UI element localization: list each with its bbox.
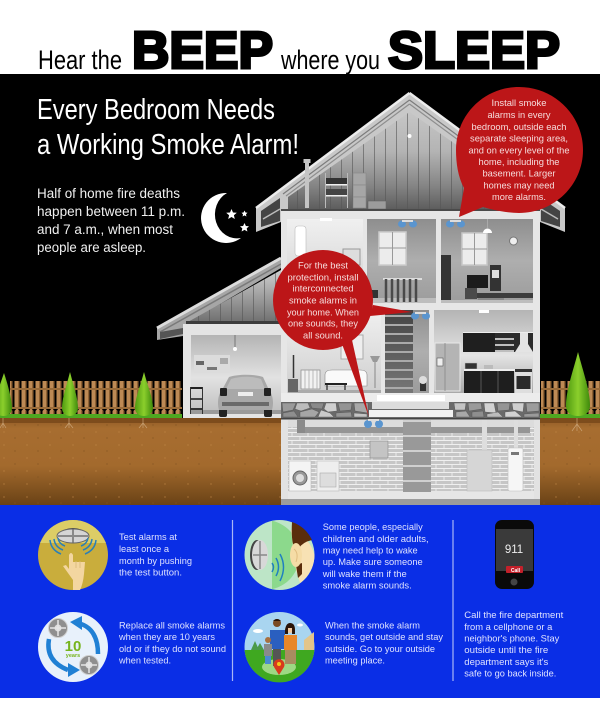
callout: interconnected alarms: one sounds, they [288, 318, 358, 330]
callout: interconnected alarms [273, 250, 412, 417]
text: test alarms: least once a [119, 544, 170, 555]
lower floor rooms [287, 310, 533, 393]
icon: wake up help [244, 520, 314, 590]
icon: replace after 10 years: 10 [65, 638, 81, 655]
callout: interconnected alarms: For the best [298, 260, 348, 272]
icon: family at meeting place [244, 612, 314, 682]
text: get outside: When the smoke alarm [325, 620, 420, 632]
text: replace alarms [118, 620, 226, 666]
callout: install smoke alarms: basement. Larger [482, 168, 556, 180]
icon: phone [495, 520, 534, 589]
basement stairs [403, 420, 431, 492]
text: wake others: may need help to wake [323, 546, 418, 556]
text: get outside: outside. Go to your outside [325, 644, 435, 655]
house body [281, 210, 540, 505]
text: test alarms: Test alarms at [119, 532, 177, 543]
white floor slab [281, 393, 540, 402]
callout: install smoke alarms: alarms in every [488, 110, 551, 121]
room: living room [287, 310, 381, 393]
callout: install smoke alarms [456, 87, 583, 217]
callout: install smoke alarms: bedroom, outside each [472, 122, 566, 133]
heading: every bedroom: Every Bedroom Needs [37, 94, 275, 126]
callout: install smoke alarms: Install smoke [492, 98, 546, 109]
basement [281, 418, 540, 505]
text: half of home fire deaths: happen between 11 p.m. [37, 204, 185, 219]
icon: replace after 10 years: years [66, 653, 80, 659]
smoke alarm: basement [364, 419, 383, 428]
room: bathroom [287, 218, 363, 303]
heading: every bedroom [37, 94, 299, 161]
title: Hear the [38, 45, 122, 75]
dryer [317, 461, 339, 491]
callout: install smoke alarms: homes may need [484, 180, 554, 192]
text: call the fire department: neighbor's phone. Stay [464, 634, 560, 644]
text: call the fire department: outside until the fire [464, 645, 548, 656]
fence [10, 381, 600, 415]
panel: safety tips [0, 505, 600, 698]
main roof [256, 93, 565, 232]
house [157, 93, 565, 505]
text: wake others: smoke alarm sounds. [323, 580, 412, 592]
heading: every bedroom: a Working Smoke Alarm! [37, 129, 299, 161]
vent pipe [304, 159, 310, 208]
text: call the fire department: from a cellphone or a [464, 622, 553, 633]
garage [183, 324, 283, 418]
icon: moon and stars [201, 193, 249, 243]
text: wake others: up. Make sure someone [323, 557, 423, 568]
callout: install smoke alarms: home, including the [478, 157, 560, 168]
text: call the fire department [464, 610, 564, 680]
icon: replace after 10 years [38, 612, 108, 682]
boxes [353, 173, 366, 208]
text: replace alarms: when tested. [118, 656, 171, 666]
smoke alarm: stair landing [411, 312, 430, 320]
text: wake others [322, 522, 429, 592]
garage roof [157, 258, 281, 340]
title: where you [280, 45, 380, 75]
text: wake others: children and older adults, [323, 534, 429, 545]
dividers [232, 520, 453, 681]
text: test alarms [119, 532, 192, 578]
room: kitchen [434, 310, 533, 393]
text: wake others: will wake them if the [322, 569, 407, 580]
text: call the fire department: safe to go back inside. [464, 668, 556, 680]
furnace [467, 420, 492, 491]
text: get outside: meeting place. [325, 656, 385, 666]
tree roots [0, 418, 582, 431]
text: call the fire department: Call the fire department [464, 610, 564, 621]
icon: phone: Call [511, 568, 521, 574]
callout: interconnected alarms: interconnected [292, 284, 354, 294]
room: stair landing [367, 219, 436, 303]
text: half of home fire deaths [37, 186, 185, 255]
text: get outside [325, 620, 443, 666]
callout: interconnected alarms: all sound. [303, 330, 343, 342]
text: replace alarms: when they are 10 years [118, 632, 215, 643]
water heater [508, 420, 523, 491]
washer [289, 461, 311, 491]
room: stairs [385, 310, 413, 393]
text: test alarms: month by pushing [119, 556, 192, 567]
grass [0, 414, 600, 418]
room: bedroom [441, 219, 533, 303]
text: call the fire department: department says it's [464, 657, 549, 668]
text: wake others: Some people, especially [323, 522, 423, 533]
text: get outside: sounds, get outside and stay [325, 632, 443, 643]
storage cart [190, 387, 203, 414]
smoke alarm: upper left [398, 220, 417, 228]
icon: test button [38, 520, 108, 590]
title: BEEP [132, 22, 273, 80]
room: hallway [413, 310, 429, 393]
callout: install smoke alarms: separate sleeping area, [470, 134, 568, 144]
title [38, 22, 560, 80]
shelf unit [326, 173, 348, 208]
icon: phone: 911 [505, 544, 523, 556]
text: half of home fire deaths: and 7 a.m., when most [37, 222, 173, 237]
text: replace alarms: old or if they do not sound [119, 644, 226, 655]
callout: interconnected alarms: protection, install [288, 272, 358, 284]
night sky panel [0, 74, 600, 419]
attic [288, 112, 531, 210]
text: half of home fire deaths: people are asleep. [37, 240, 146, 255]
smoke alarm: upper right [446, 220, 465, 228]
ground: soil [0, 418, 600, 505]
callout: interconnected alarms: smoke alarms in [289, 296, 357, 306]
text: half of home fire deaths: Half of home fire deaths [37, 186, 180, 201]
front steps [369, 395, 453, 417]
car [218, 375, 273, 417]
callout: install smoke alarms: and on every level of the [468, 146, 570, 156]
callout: install smoke alarms: more alarms. [492, 192, 546, 203]
upper floor rooms [287, 218, 533, 303]
icon: electrical panel [370, 441, 388, 458]
callout: interconnected alarms: your home. When [287, 308, 359, 318]
title: SLEEP [388, 22, 560, 80]
crate [368, 201, 386, 209]
text: test alarms: the test button. [119, 568, 182, 578]
stone foundation [281, 402, 540, 418]
trees [0, 352, 590, 416]
text: replace alarms: Replace all smoke alarms [119, 620, 225, 632]
